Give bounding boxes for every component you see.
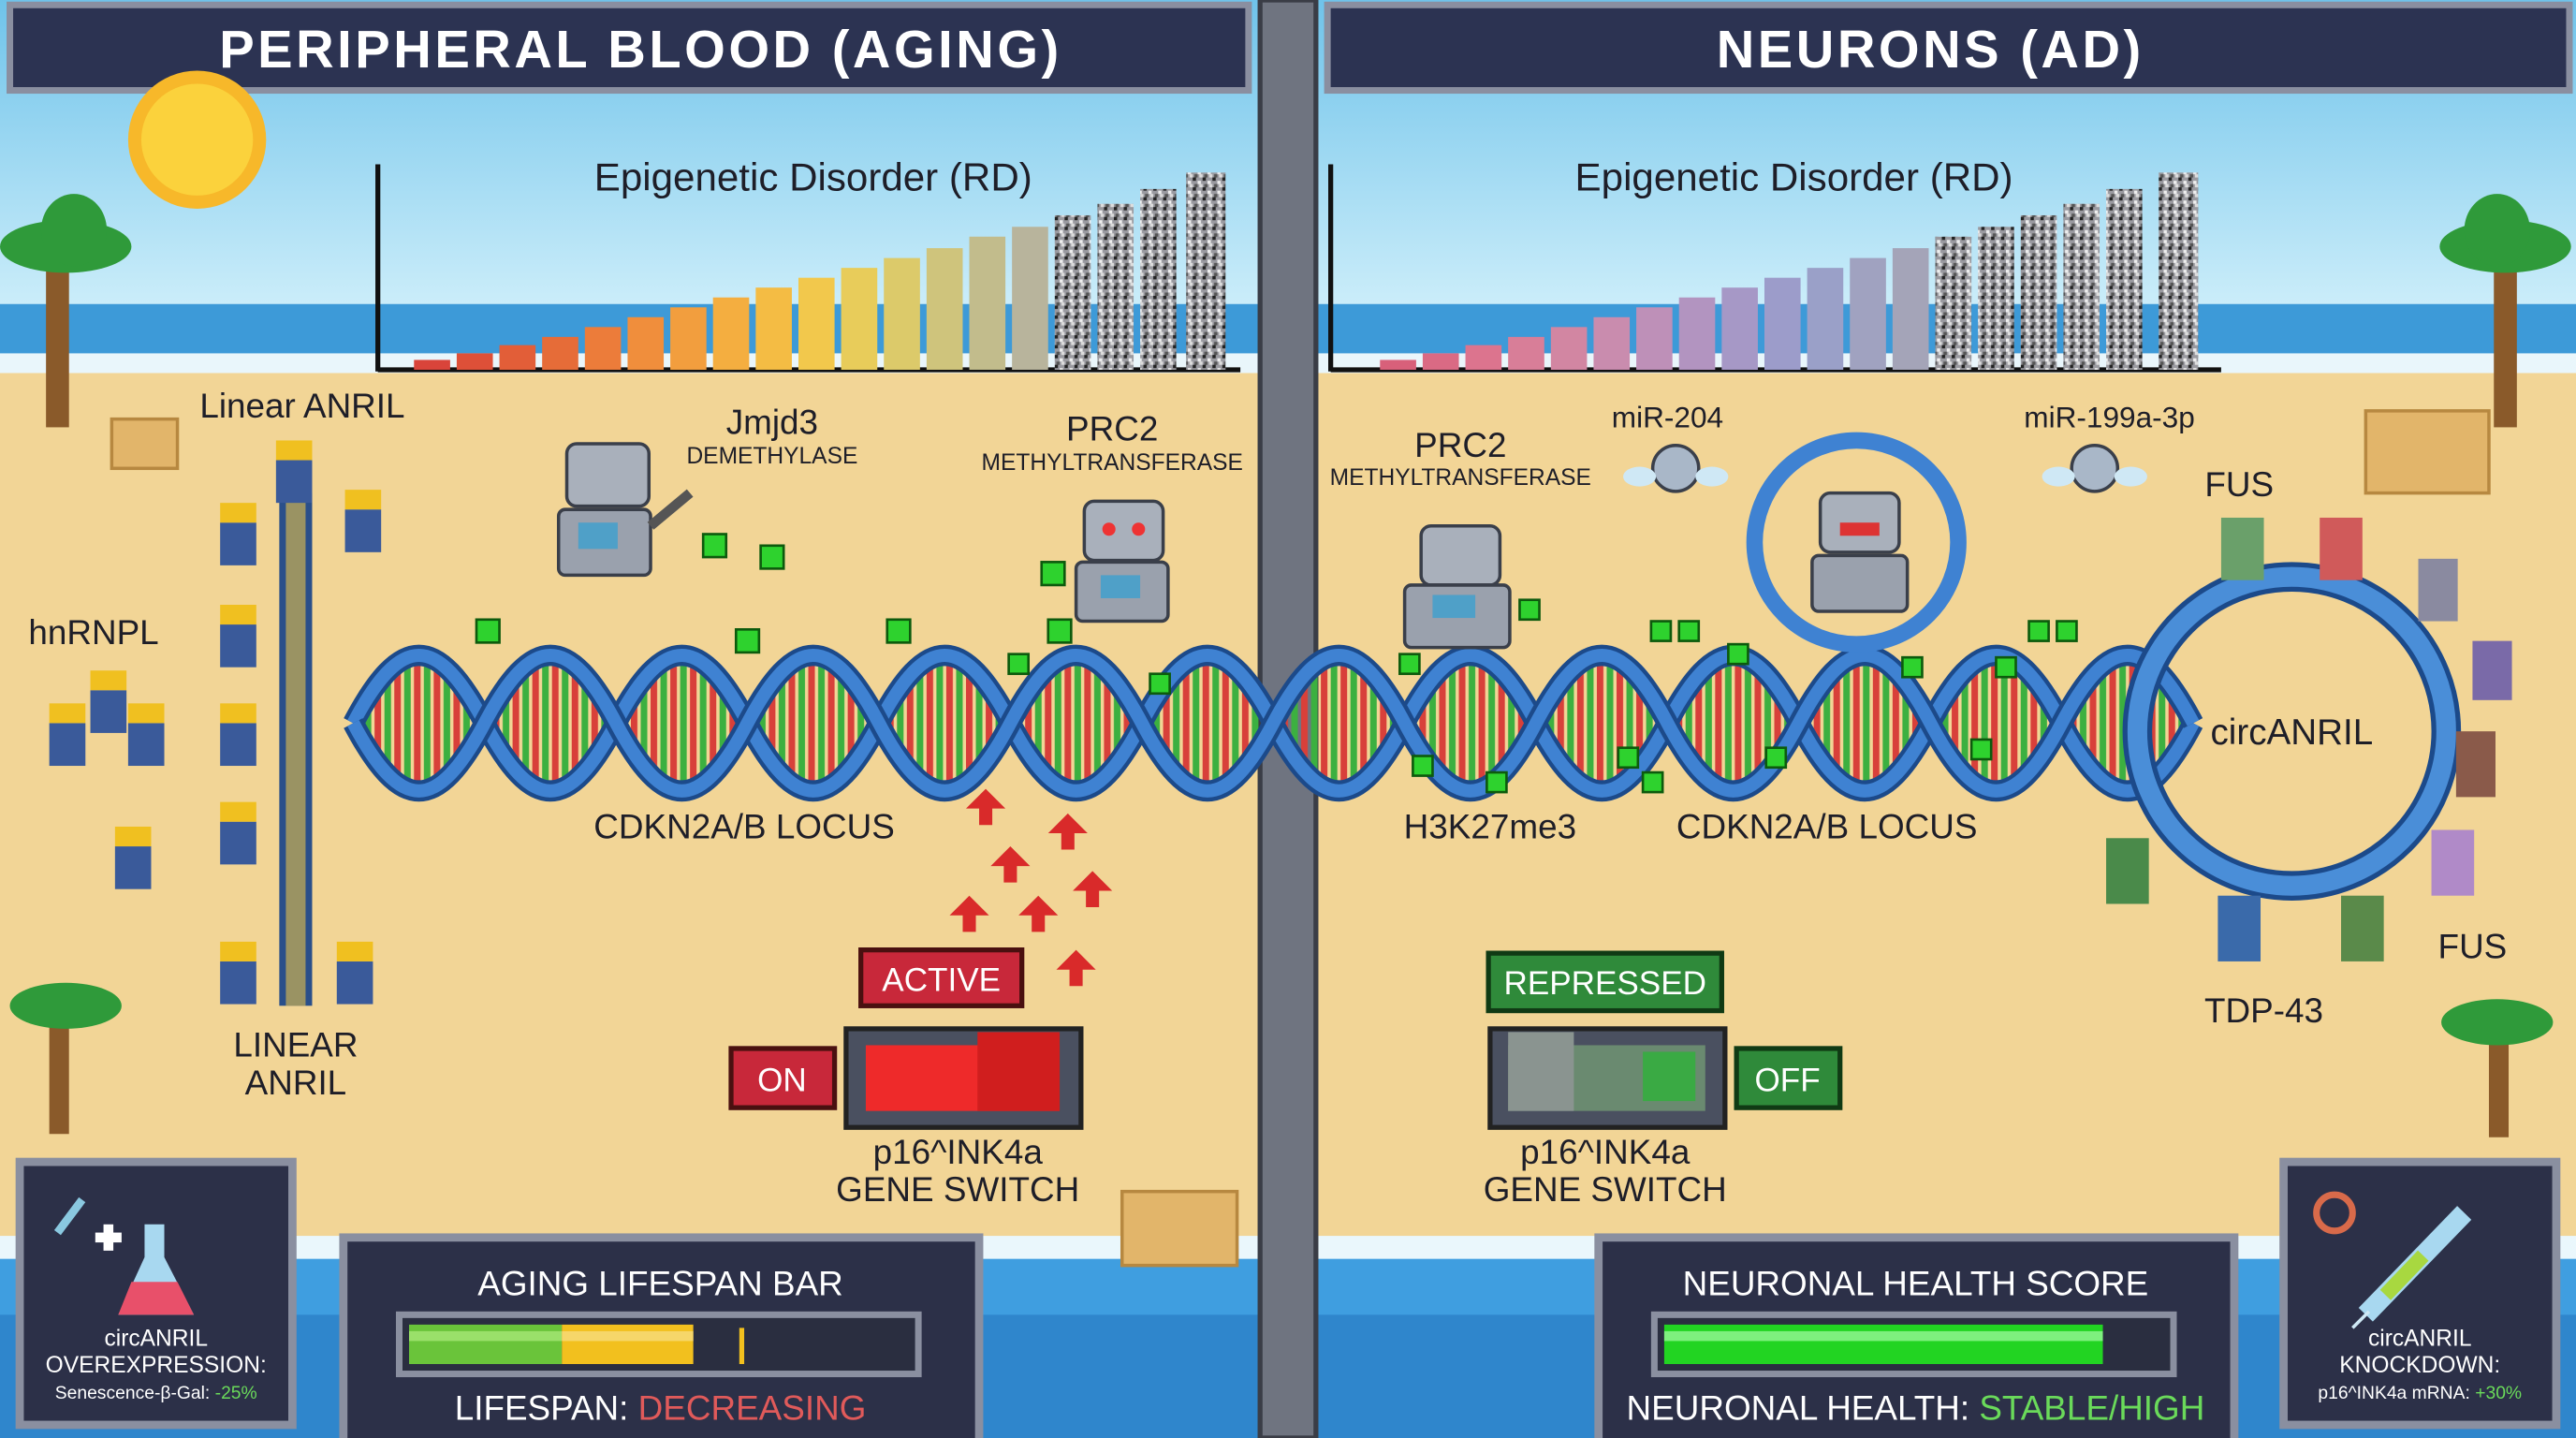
panel: circANRIL overexpression xyxy=(20,1162,292,1425)
label: Linear ANRIL top: Linear ANRIL xyxy=(199,387,405,425)
label: FUS top: FUS xyxy=(2204,465,2274,504)
methyl marks xyxy=(476,535,2076,792)
title: left xyxy=(10,5,1249,91)
label: PRC2 left: METHYLTRANSFERASE xyxy=(982,450,1243,476)
label: PRC2 left xyxy=(982,409,1243,476)
label: PRC2 right xyxy=(1330,426,1591,491)
icon: palm trees xyxy=(0,194,2571,1137)
label: PRC2 right: METHYLTRANSFERASE xyxy=(1330,465,1591,491)
panel: neuronal health score: NEURONAL HEALTH: STABLE/HIGH xyxy=(1627,1389,2204,1428)
robot: Jmjd3 xyxy=(559,444,690,575)
label: Jmjd3 xyxy=(686,403,857,469)
switch: repressed (right) xyxy=(1488,953,1840,1127)
panel: aging lifespan bar xyxy=(344,1238,979,1438)
icon: syringe and ring xyxy=(2317,1195,2465,1328)
title: right: NEURONS (AD) xyxy=(1717,20,2144,79)
chart: left epigenetic disorder xyxy=(378,155,1240,372)
ring around robot (miRNA sponge) xyxy=(1754,440,1958,644)
label: TDP-43: TDP-43 xyxy=(2204,991,2323,1030)
label: gene switch left xyxy=(836,1133,1079,1209)
circANRIL ring: circANRIL xyxy=(2210,712,2373,753)
label: LINEAR ANRIL bottom: ANRIL xyxy=(245,1064,346,1102)
chart: left epigenetic disorder: Epigenetic Disorder (RD) xyxy=(594,155,1032,199)
label: PRC2 right: PRC2 xyxy=(1414,426,1506,464)
icon: sandcastles xyxy=(111,411,2489,1266)
label: miR-204: miR-204 xyxy=(1612,400,1723,433)
chart: right epigenetic disorder xyxy=(1331,155,2221,372)
robot: PRC2 left xyxy=(1076,501,1168,622)
label: gene switch left: GENE SWITCH xyxy=(836,1170,1079,1209)
label: gene switch right: p16^INK4a xyxy=(1520,1133,1690,1171)
label: Jmjd3: DEMETHYLASE xyxy=(686,444,857,469)
icon: miR-204 fairy xyxy=(1623,446,1728,492)
panel: circANRIL overexpression: OVEREXPRESSION: xyxy=(46,1353,267,1378)
robot: trapped xyxy=(1812,493,1908,611)
switch: active (left): ACTIVE xyxy=(882,962,1001,999)
divider xyxy=(1260,0,1316,1438)
switch: active (left) xyxy=(731,950,1081,1127)
switch: repressed (right): REPRESSED xyxy=(1504,965,1706,1002)
panel: neuronal health score: NEURONAL HEALTH SCORE xyxy=(1683,1264,2148,1302)
label: CDKN2A/B locus right: CDKN2A/B LOCUS xyxy=(1676,807,1977,845)
icon: flask xyxy=(57,1199,194,1314)
label: gene switch right: GENE SWITCH xyxy=(1484,1170,1727,1209)
label: miR-199a-3p: miR-199a-3p xyxy=(2024,400,2195,433)
title: right xyxy=(1327,5,2569,91)
chart: right epigenetic disorder: Epigenetic Disorder (RD) xyxy=(1575,155,2013,199)
panel: circANRIL knockdown: circANRIL xyxy=(2368,1327,2472,1352)
protein figures around circANRIL xyxy=(2106,518,2512,961)
label: gene switch right xyxy=(1484,1133,1727,1209)
label: PRC2 left: PRC2 xyxy=(1066,409,1158,448)
robot: PRC2 right xyxy=(1405,526,1510,648)
title: left: PERIPHERAL BLOOD (AGING) xyxy=(219,20,1062,79)
panel: aging lifespan bar: LIFESPAN: DECREASING xyxy=(455,1389,866,1428)
label: LINEAR ANRIL bottom: LINEAR xyxy=(233,1026,358,1064)
panel: circANRIL knockdown xyxy=(2284,1162,2556,1425)
panel: circANRIL overexpression: Senescence-β-Gal: -25% xyxy=(55,1384,257,1403)
switch: repressed (right): OFF xyxy=(1754,1063,1821,1099)
label: H3K27me3: H3K27me3 xyxy=(1404,807,1576,845)
circANRIL ring xyxy=(2137,577,2446,886)
arrows: red activation arrows xyxy=(949,789,1112,986)
panel: aging lifespan bar: AGING LIFESPAN BAR xyxy=(477,1264,843,1302)
label: LINEAR ANRIL bottom xyxy=(233,1026,358,1102)
panel: circANRIL knockdown: p16^INK4a mRNA: +30% xyxy=(2318,1384,2522,1403)
switch: active (left): ON xyxy=(757,1063,807,1099)
workers: linear ANRIL builders xyxy=(50,440,381,1005)
icon: miR-199a-3p fairy xyxy=(2042,446,2147,492)
panel: neuronal health score xyxy=(1599,1238,2234,1438)
label: FUS bottom: FUS xyxy=(2438,927,2507,965)
label: CDKN2A/B locus left: CDKN2A/B LOCUS xyxy=(593,807,895,845)
panel: circANRIL overexpression: circANRIL xyxy=(104,1327,208,1352)
label: Jmjd3: Jmjd3 xyxy=(726,403,818,441)
DNA helix xyxy=(344,644,2203,801)
label: hnRNPL: hnRNPL xyxy=(28,613,159,652)
icon: sun xyxy=(128,70,266,209)
label: gene switch left: p16^INK4a xyxy=(873,1133,1043,1171)
panel: circANRIL knockdown: KNOCKDOWN: xyxy=(2339,1353,2500,1378)
